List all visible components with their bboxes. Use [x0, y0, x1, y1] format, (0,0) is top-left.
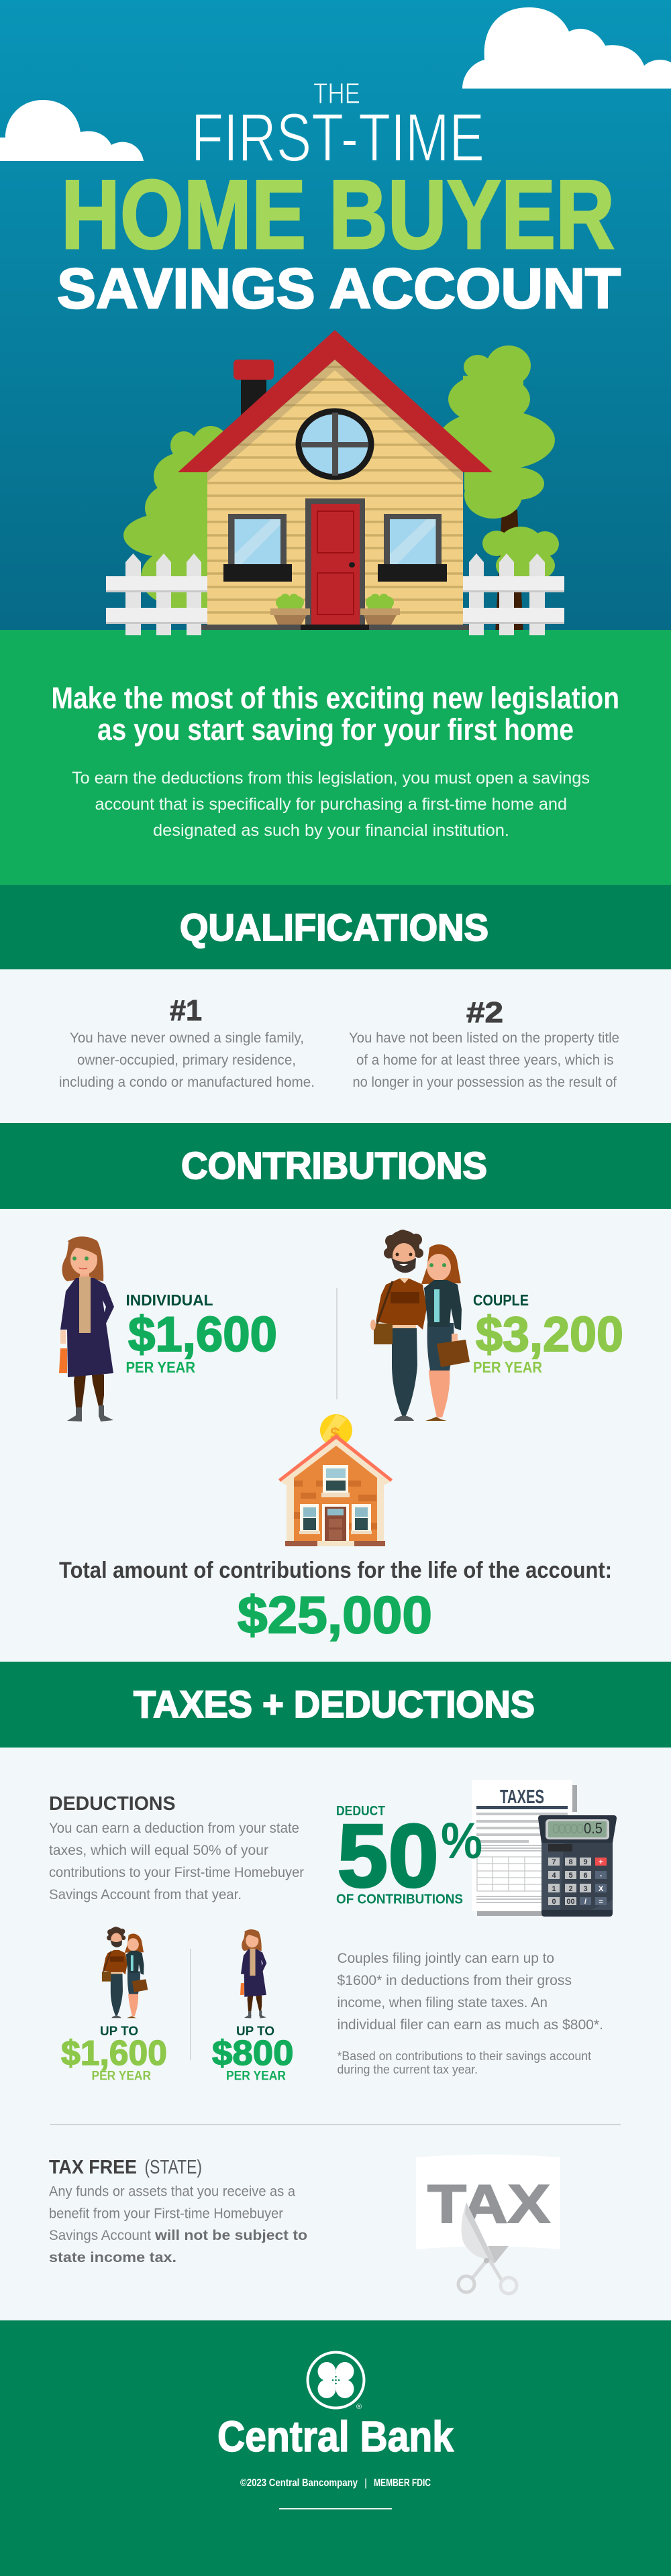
- deduction amount individual: UP TO: [236, 2025, 274, 2039]
- tree right: [438, 345, 559, 634]
- taxes background: [0, 1748, 671, 2320]
- icon: calculator: 0: [552, 1898, 556, 1906]
- icon: calculator: 8: [568, 1858, 573, 1866]
- taxes banner: [0, 1662, 671, 1748]
- qualification 1: including a condo or manufactured home.: [59, 1075, 315, 1090]
- panel: intro: [0, 630, 671, 885]
- total contributions: [59, 1558, 612, 1644]
- fence right: [463, 553, 564, 635]
- qualifications banner: [0, 885, 671, 969]
- footer background: [0, 2320, 671, 2576]
- icon: calculator: +: [599, 1858, 603, 1866]
- house wall: [201, 360, 470, 625]
- panel: taxes and deductions: [0, 1662, 671, 2320]
- couple amount: [473, 1291, 623, 1376]
- total contributions: $25,000: [238, 1585, 432, 1644]
- qualification 2: no longer in your possession as the result of: [353, 1075, 617, 1090]
- tax free text: [49, 2157, 307, 2265]
- logo: ®: [356, 2403, 362, 2411]
- icon: calculator: 7: [552, 1858, 556, 1866]
- deduction amount couple: PER YEAR: [91, 2069, 151, 2084]
- couples filing text: Couples filing jointly can earn up to: [337, 1951, 554, 1966]
- icon: calculator: 2: [568, 1885, 573, 1893]
- intro text: To earn the deductions from this legislation, you must open a savings: [72, 769, 590, 788]
- cloud right: [462, 7, 671, 89]
- deductions text: contributions to your First-time Homebuyer: [49, 1865, 304, 1880]
- intro text: [72, 769, 590, 840]
- tree left: [123, 426, 231, 610]
- deduct 50 percent: DEDUCT: [336, 1804, 385, 1819]
- qualification 1: [59, 994, 315, 1090]
- flower pot left: [270, 594, 310, 625]
- qualifications background: [0, 969, 671, 1123]
- tax free text: benefit from your First-time Homebuyer: [49, 2206, 283, 2222]
- qualification 1: #1: [170, 994, 202, 1027]
- deduction amount individual: $800: [212, 2034, 294, 2073]
- sky background: [0, 0, 671, 631]
- couples filing text: individual filer can earn as much as $800*.: [337, 2017, 603, 2033]
- deduct 50 percent: [336, 1804, 482, 1907]
- deduction amount couple: [61, 2025, 167, 2084]
- icon: house with coin: [278, 1414, 393, 1546]
- icon: calculator: 6: [583, 1872, 588, 1880]
- logo: [307, 2352, 364, 2411]
- small figure: couple: [102, 1927, 148, 2018]
- couple amount: PER YEAR: [473, 1358, 542, 1376]
- total contributions: Total amount of contributions for the life of the account:: [59, 1558, 612, 1583]
- contributions banner: [0, 1123, 671, 1209]
- copyright: ©2023 Central Bancompany: [240, 2477, 358, 2489]
- qualification 2: You have not been listed on the property title: [349, 1030, 619, 1046]
- icon: calculator: 0.5: [584, 1820, 603, 1837]
- icon: calculator: 4: [552, 1872, 556, 1880]
- individual amount: $1,600: [128, 1307, 277, 1362]
- panel: footer: [0, 2320, 671, 2576]
- icon: calculator: 00: [566, 1898, 575, 1906]
- tax free text: will not be subject to: [154, 2228, 307, 2243]
- icon: calculator: 9: [583, 1858, 588, 1866]
- intro heading: as you start saving for your first home: [97, 712, 574, 747]
- figure: woman: [59, 1236, 114, 1421]
- panel: hero: [0, 0, 671, 635]
- deduct 50 percent: %: [441, 1813, 482, 1870]
- panel: contributions: [0, 1123, 671, 1662]
- cloud left: [0, 100, 144, 161]
- tax free text: Savings Account: [49, 2228, 151, 2243]
- footnote: during the current tax year.: [337, 2063, 478, 2076]
- qualification 1: You have never owned a single family,: [70, 1030, 304, 1046]
- illustration: house with trees and fence: [106, 330, 564, 635]
- qualifications banner: QUALIFICATIONS: [180, 906, 488, 949]
- tax free text: TAX FREE: [49, 2157, 137, 2178]
- icon: house with coin: $: [330, 1424, 340, 1444]
- roof: [178, 330, 493, 472]
- figure: couple: [370, 1230, 470, 1421]
- deductions text: Savings Account from that year.: [49, 1887, 242, 1902]
- small figure: woman: [240, 1929, 266, 2018]
- intro background: [0, 630, 671, 885]
- deduct 50 percent: 50: [337, 1806, 439, 1907]
- fence left: [106, 553, 207, 635]
- taxes banner: TAXES + DEDUCTIONS: [134, 1683, 535, 1726]
- copyright: |: [364, 2477, 367, 2489]
- couples filing text: [337, 1951, 603, 2033]
- icon: calculator: 1: [552, 1885, 556, 1893]
- individual amount: PER YEAR: [126, 1358, 195, 1376]
- icon: calculator: 3: [583, 1885, 588, 1893]
- footnote: [337, 2049, 591, 2076]
- flower pot right: [360, 594, 400, 625]
- window left: [223, 514, 292, 582]
- intro text: designated as such by your financial institution.: [153, 821, 509, 840]
- window right: [378, 514, 447, 582]
- icon: scissors cutting tax: [416, 2155, 560, 2294]
- tax free text: Any funds or assets that you receive as a: [49, 2184, 295, 2199]
- title: THE: [313, 77, 360, 110]
- icon: calculator: 00000: [552, 1822, 584, 1837]
- deduct 50 percent: OF CONTRIBUTIONS: [336, 1892, 463, 1907]
- title: FIRST-TIME: [191, 99, 484, 176]
- qualification 2: of a home for at least three years, which is: [356, 1053, 613, 1068]
- intro heading: [51, 681, 619, 747]
- icon: tax document: TAXES: [500, 1786, 544, 1808]
- individual amount: INDIVIDUAL: [126, 1291, 213, 1309]
- deduction amount couple: UP TO: [100, 2025, 138, 2039]
- icon: tax document: [472, 1780, 577, 1916]
- icon: calculator: -: [600, 1872, 603, 1880]
- deductions text: [49, 1793, 304, 1902]
- footnote: *Based on contributions to their savings account: [337, 2049, 591, 2063]
- contributions banner: CONTRIBUTIONS: [181, 1144, 487, 1187]
- icon: calculator: =: [599, 1898, 603, 1906]
- deductions text: You can earn a deduction from your state: [49, 1821, 299, 1836]
- icon: calculator: X: [599, 1885, 604, 1893]
- panel: qualifications: [0, 885, 671, 1123]
- tax free text: state income tax.: [49, 2250, 176, 2265]
- deduction amount couple: $1,600: [61, 2034, 167, 2073]
- round window: [299, 411, 371, 477]
- brand name: Central Bank: [217, 2412, 454, 2461]
- title: SAVINGS ACCOUNT: [57, 257, 621, 320]
- tax free text: (STATE): [145, 2157, 202, 2178]
- deduction amount individual: [212, 2025, 294, 2084]
- icon: calculator: 5: [568, 1872, 573, 1880]
- deduction amount individual: PER YEAR: [226, 2069, 286, 2084]
- icon: calculator: /: [584, 1898, 586, 1906]
- couple amount: $3,200: [476, 1307, 623, 1362]
- individual amount: [126, 1291, 277, 1376]
- couples filing text: income, when filing state taxes. An: [337, 1995, 548, 2010]
- deductions text: DEDUCTIONS: [49, 1793, 176, 1815]
- contributions background: [0, 1209, 671, 1662]
- intro text: account that is specifically for purchasing a first-time home and: [95, 795, 567, 814]
- icon: scissors cutting tax: TAX: [427, 2174, 550, 2235]
- couples filing text: $1600* in deductions from their gross: [337, 1973, 572, 1988]
- copyright: MEMBER FDIC: [374, 2477, 431, 2489]
- icon: calculator: [538, 1815, 617, 1917]
- qualification 2: #2: [466, 996, 503, 1029]
- deductions text: taxes, which will equal 50% of your: [49, 1843, 268, 1858]
- couple amount: COUPLE: [473, 1291, 529, 1309]
- porch: [201, 625, 470, 635]
- door: [305, 498, 365, 625]
- qualification 2: [349, 996, 619, 1090]
- title: [57, 77, 621, 320]
- qualification 1: owner-occupied, primary residence,: [77, 1053, 296, 1068]
- chimney: [234, 360, 274, 417]
